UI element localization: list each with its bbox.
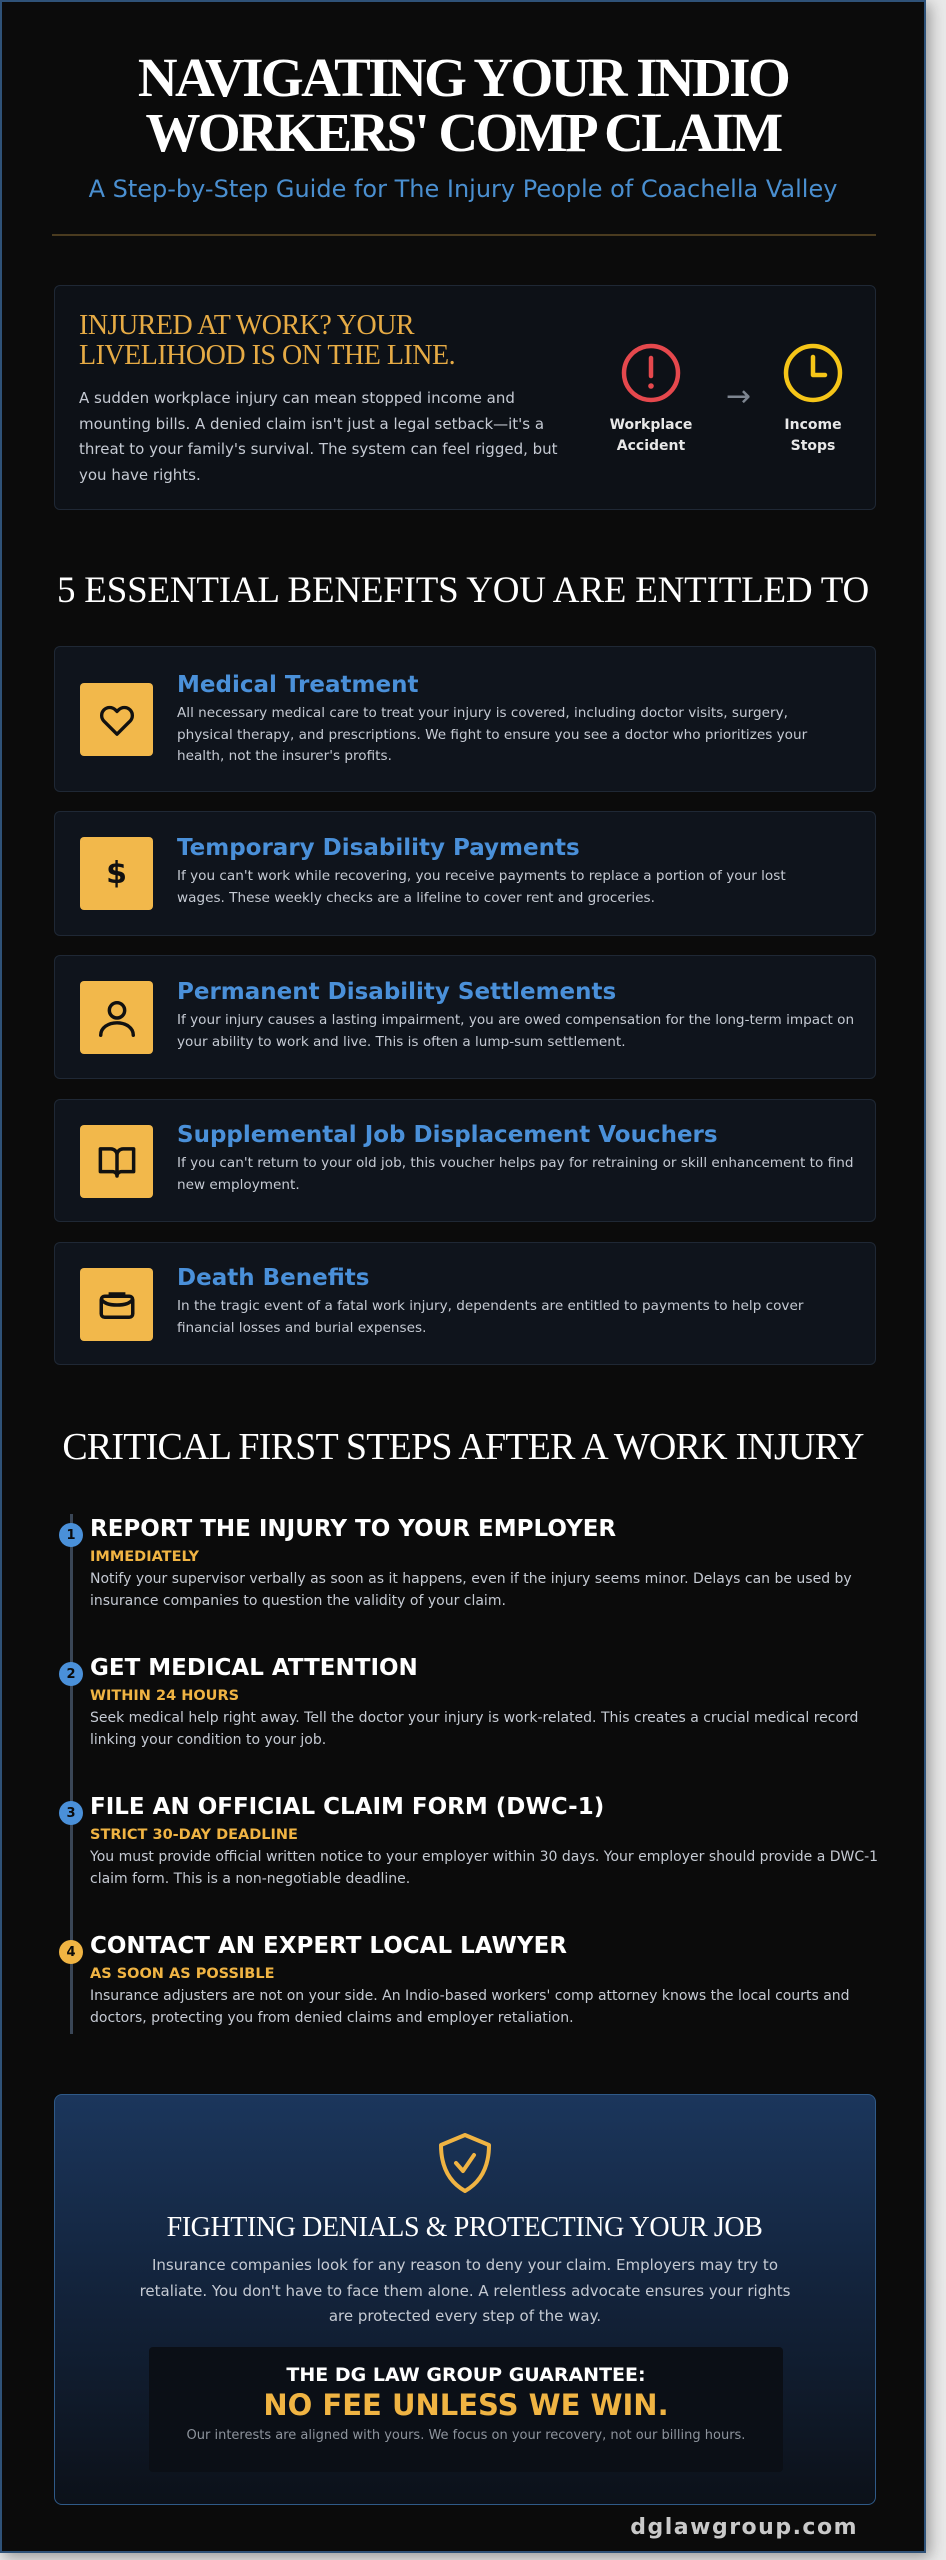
title [138,47,788,163]
step 1: REPORT THE INJURY TO YOUR EMPLOYER [90,1516,616,1542]
guarantee box [149,2347,783,2472]
icon: income stops: Income [784,417,842,433]
panel: medical treatment [54,646,876,792]
panel: death benefits: Death Benefits [177,1265,369,1291]
step 4: AS SOON AS POSSIBLE [90,1966,274,1982]
step 1: IMMEDIATELY [90,1549,199,1565]
subtitle: A Step-by-Step Guide for The Injury People of Coachella Valley [89,175,837,203]
step 1: Notify your supervisor verbally as soon as it happens, even if the injury seems minor. Delays can be used by insurance companies to question the validity of your claim. [90,1571,852,1608]
title: WORKERS' COMP CLAIM [145,102,781,163]
icon: book [80,1125,153,1198]
icon: dollar: $ [106,856,127,891]
icon: income stops: Stops [791,438,835,454]
step 1 [90,1516,852,1608]
panel: permanent disability: Permanent Disability Settlements [177,979,616,1005]
icon: dollar [80,837,153,910]
step 3 [90,1794,878,1886]
intro text: A sudden workplace injury can mean stopped income and mounting bills. A denied claim isn't just a legal setback—it's a threat to your family's survival. The system can feel rigged, but you have rights. [79,389,558,484]
icon: step 3 number [59,1801,83,1825]
guarantee box: Our interests are aligned with yours. We focus on your recovery, not our billing hours. [187,2428,745,2443]
panel: death benefits [54,1242,876,1365]
icon: income stops [784,344,842,454]
title: NAVIGATING YOUR INDIO [138,47,788,108]
panel: permanent disability [54,955,876,1079]
panel: temporary disability: If you can't work while recovering, you receive payments to replace a portion of your lost wages. These weekly checks are a lifeline to cover rent and groceries. [177,868,786,906]
step 2: WITHIN 24 HOURS [90,1688,239,1704]
panel: permanent disability: If your injury causes a lasting impairment, you are owed compensation for the long-term impact on your ability to work and live. This is often a lump-sum settlement. [177,1012,854,1050]
icon: step 1 number: 1 [66,1528,76,1543]
icon: heart [80,683,153,756]
icon: shield [439,2133,491,2193]
step 4 [90,1933,850,2026]
step 4: Insurance adjusters are not on your side. An Indio-based workers' comp attorney knows the local courts and doctors, protecting you from denied claims and employer retaliation. [90,1988,850,2026]
panel: medical treatment: All necessary medical care to treat your injury is covered, including doctor visits, surgery, physical therapy, and prescriptions. We fight to ensure you see a doctor who prioritizes your health, not the insurer's profits. [177,705,807,764]
icon: step 2 number [59,1662,83,1686]
icon: workplace accident: Workplace [610,417,692,433]
footer: website: dglawgroup.com [630,2515,858,2540]
CTA heading: FIGHTING DENIALS & PROTECTING YOUR JOB [167,2212,762,2243]
panel: death benefits: In the tragic event of a fatal work injury, dependents are entitled to payments to help cover financial losses and burial expenses. [177,1298,803,1336]
step 2: Seek medical help right away. Tell the doctor your injury is work-related. This creates a crucial medical record linking your condition to your job. [90,1710,858,1748]
icon: step 1 number [59,1523,83,1547]
step 3: FILE AN OFFICIAL CLAIM FORM (DWC-1) [90,1794,604,1820]
arrow: → [726,379,751,414]
icon: workplace accident [610,344,692,454]
panel: temporary disability: Temporary Disability Payments [177,835,580,861]
heading: critical steps: CRITICAL FIRST STEPS AFTER A WORK INJURY [62,1426,864,1468]
icon: workplace accident: Accident [617,438,685,454]
intro heading: INJURED AT WORK? YOUR [79,310,414,341]
step 2 [90,1655,858,1748]
icon: person [80,981,153,1054]
panel: fighting denials CTA [54,2094,876,2505]
heading: benefits: 5 ESSENTIAL BENEFITS YOU ARE ENTITLED TO [57,570,869,611]
guarantee box: THE DG LAW GROUP GUARANTEE: [286,2364,646,2386]
icon: wallet [80,1268,153,1341]
icon: step 4 number [59,1940,83,1964]
panel: job displacement [54,1099,876,1222]
step 4: CONTACT AN EXPERT LOCAL LAWYER [90,1933,567,1959]
panel: job displacement: If you can't return to your old job, this voucher helps pay for retraining or skill enhancement to find new employment. [177,1155,853,1192]
icon: step 4 number: 4 [66,1945,76,1960]
panel: job displacement: Supplemental Job Displacement Vouchers [177,1122,718,1148]
icon: step 2 number: 2 [66,1667,76,1682]
panel: intro [54,285,876,510]
step 3: STRICT 30-DAY DEADLINE [90,1827,298,1843]
CTA text: Insurance companies look for any reason to deny your claim. Employers may try to retaliate. You don't have to face them alone. A relentless advocate ensures your rights are protected every step of the way. [140,2256,790,2325]
icon: step 3 number: 3 [66,1806,76,1821]
guarantee box: NO FEE UNLESS WE WIN. [263,2388,669,2422]
panel: temporary disability [54,811,876,936]
intro heading [79,310,455,371]
step 2: GET MEDICAL ATTENTION [90,1655,418,1681]
intro heading: LIVELIHOOD IS ON THE LINE. [79,340,455,371]
step 3: You must provide official written notice to your employer within 30 days. Your employer should provide a DWC-1 claim form. This is a non-negotiable deadline. [90,1849,878,1886]
panel: medical treatment: Medical Treatment [177,672,418,698]
